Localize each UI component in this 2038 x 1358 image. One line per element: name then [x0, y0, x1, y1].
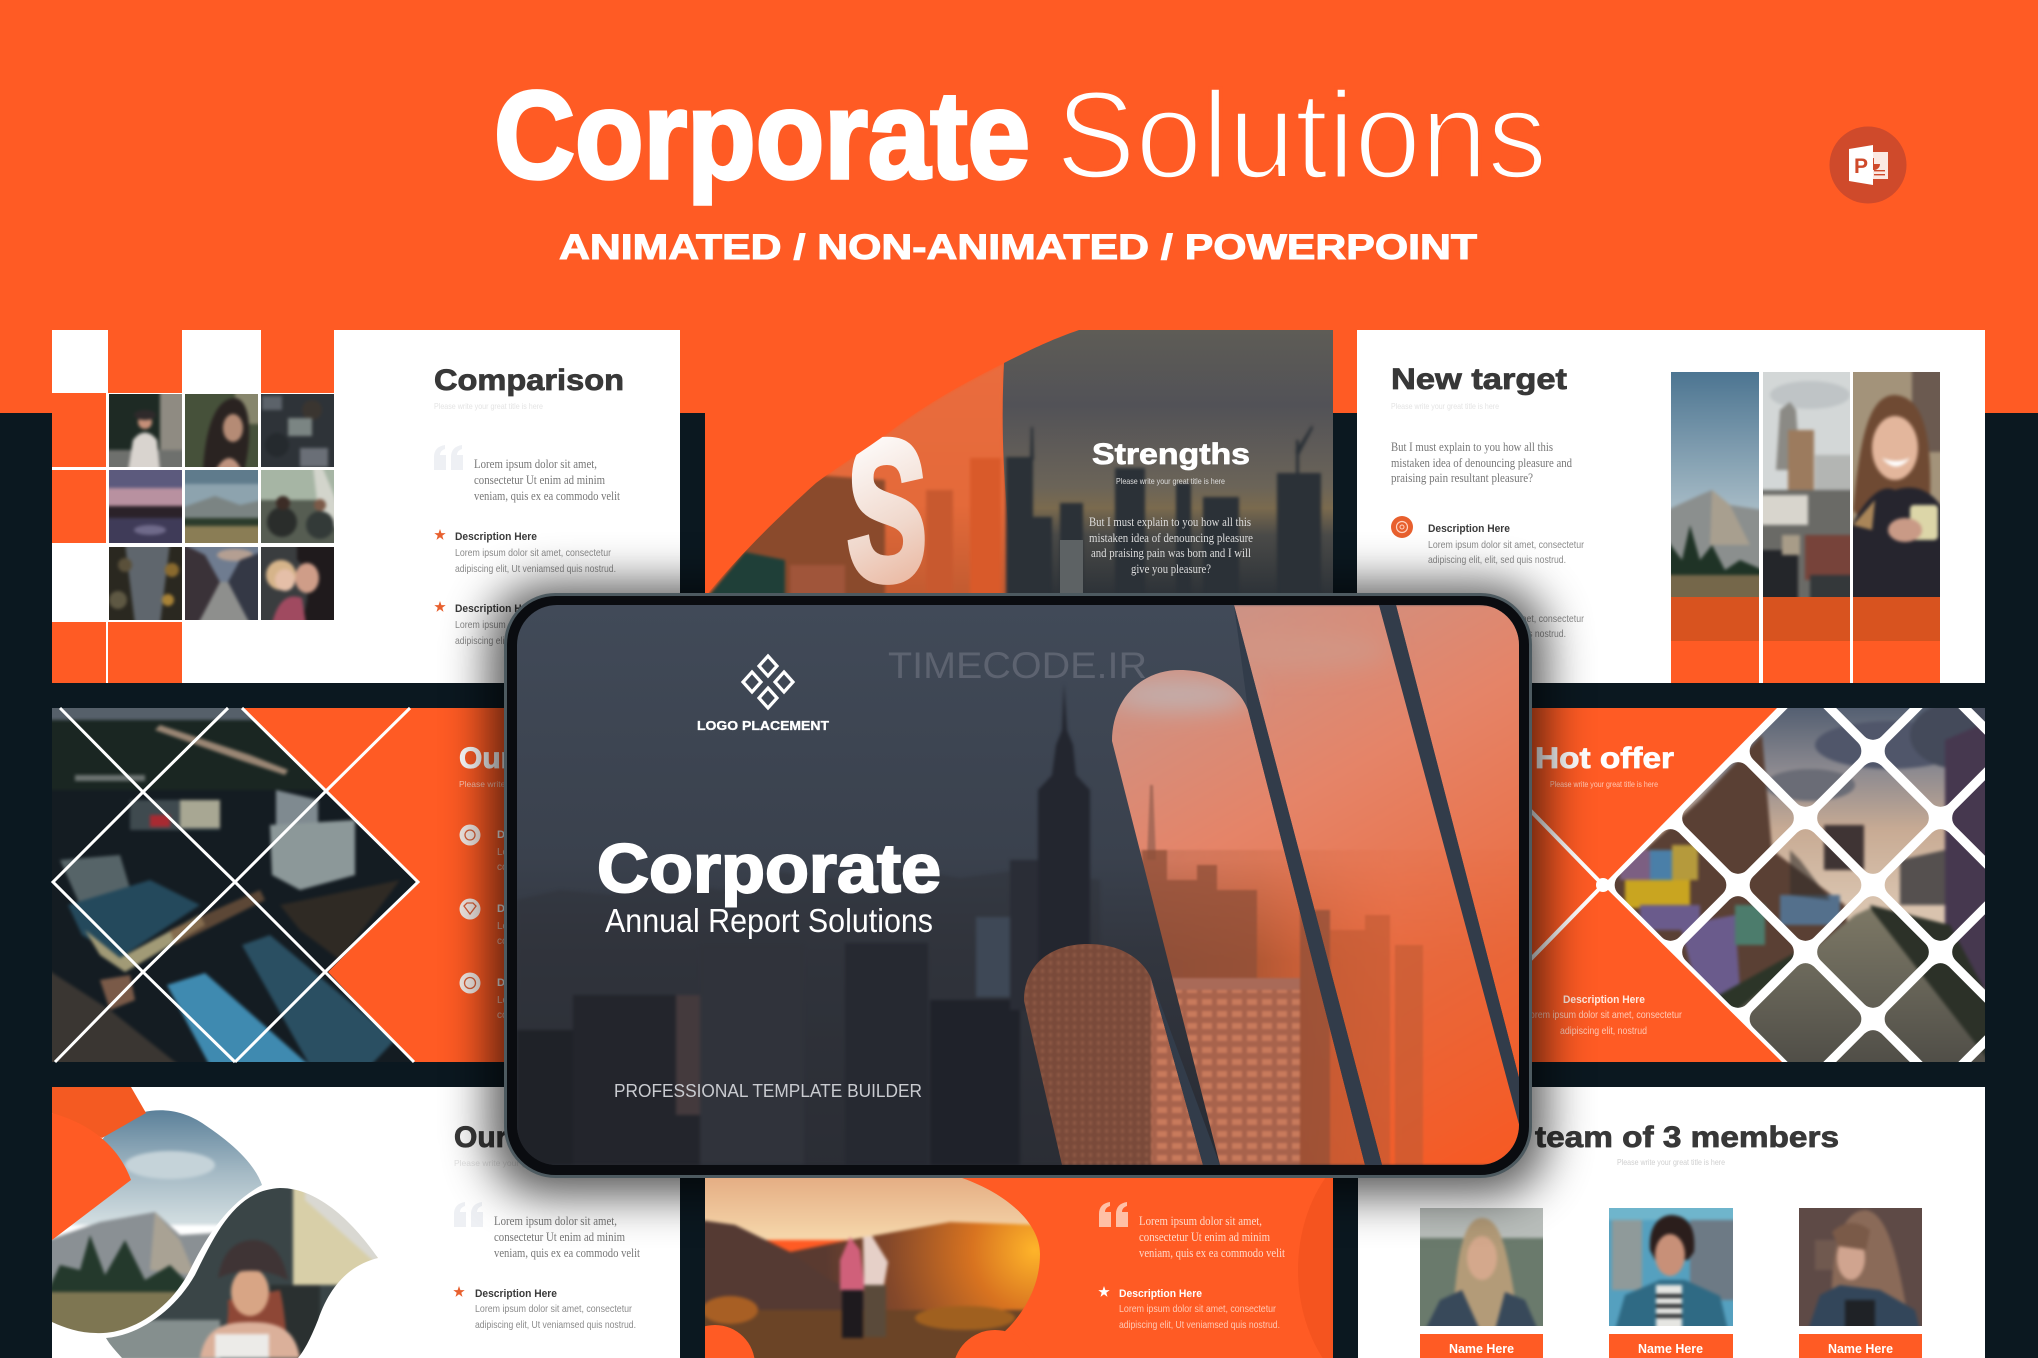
tablet subtitle: Annual Report Solutions [605, 902, 933, 939]
paragraph: mistaken idea of denouncing pleasure [1089, 531, 1253, 545]
orange header background [0, 0, 2038, 413]
quote text: veniam, quis ex ea commodo velit [1139, 1246, 1285, 1260]
caption: Please write your great title is here [1116, 476, 1225, 486]
icon list: Lo [497, 995, 509, 1006]
photo: crowd [261, 394, 334, 467]
dark lower background [0, 413, 2038, 1358]
photo: mother and child [261, 547, 334, 620]
photo: woman in hat [109, 394, 182, 467]
description item 1: Description Here [1428, 523, 1510, 535]
team member 2 [1605, 1204, 1737, 1358]
icon: powerpoint [1830, 126, 1906, 204]
panel: our services slide [51, 706, 504, 1064]
panel: curved photo slide [48, 1087, 680, 1358]
team member 1: Name Here [1449, 1341, 1514, 1356]
quote text: consectetur Ut enim ad minim [1139, 1230, 1270, 1244]
description item 2: adipiscing elit, Ut veniamsed quis nostrud. [455, 635, 616, 647]
paragraph: mistaken idea of denouncing pleasure and [1391, 456, 1573, 470]
photo: people [261, 470, 334, 543]
heading: hot offer: Hot offer [1535, 742, 1674, 775]
caption: Please write your great title is here [1550, 779, 1658, 789]
panel: hot offer slide [1532, 708, 1985, 1062]
description: Lorem ipsum dolor sit amet, consectetur [1525, 1009, 1682, 1021]
icon: powerpoint: P [1854, 155, 1868, 178]
caption: Please write your great title is here [1617, 1157, 1725, 1167]
orange corner shapes [52, 1087, 146, 1240]
icon list: Lo [497, 921, 509, 932]
tablet mockup [506, 594, 1540, 1176]
photo: woman portrait [185, 394, 258, 467]
screen [517, 605, 1540, 1165]
photo grid [105, 390, 338, 624]
icon: quote [1099, 1202, 1128, 1227]
photo: sunset town [109, 470, 182, 543]
subtitle: ANIMATED / NON-ANIMATED / POWERPOINT [559, 228, 1477, 267]
tablet title: Corporate [597, 830, 941, 907]
quote text [494, 1214, 640, 1260]
icon list [460, 824, 509, 1021]
orange curve cover [705, 330, 1079, 600]
mountain blob photo [52, 1110, 262, 1334]
city skyline [517, 683, 1100, 1165]
icon list: co [497, 1010, 508, 1021]
solid orange band [1671, 641, 1940, 683]
icon: logo [743, 656, 793, 708]
team member 2: Name Here [1638, 1341, 1703, 1356]
woman blob photo [100, 1185, 390, 1358]
caption: Please write your great title is here [459, 779, 590, 789]
icon: target [1391, 516, 1413, 538]
paragraph [1089, 515, 1253, 576]
team member 3 [1795, 1204, 1926, 1358]
main title: Solutions [1056, 67, 1547, 205]
description item: adipiscing elit, Ut veniamsed quis nostrud. [1119, 1319, 1280, 1331]
sunset photo [700, 1170, 1045, 1358]
quote text: veniam, quis ex ea commodo velit [474, 489, 620, 503]
description item 2: Lorem ipsum dolor sit amet, consectetur [1428, 613, 1584, 625]
photo: mountains [185, 470, 258, 543]
heading: new target: New target [1391, 363, 1567, 396]
description item 2: Description Here [455, 603, 537, 615]
faint arc [1298, 1178, 1333, 1358]
description item: adipiscing elit, Ut veniamsed quis nostrud. [475, 1319, 636, 1331]
paragraph: and praising pain was born and I will [1091, 546, 1251, 560]
translucent orange band [1671, 597, 1940, 641]
icon list: D [497, 977, 505, 989]
paragraph: But I must explain to you how all this [1089, 515, 1251, 529]
main title: Corporate [494, 67, 1030, 205]
paragraph: But I must explain to you how all this [1391, 440, 1553, 454]
icon list: D [497, 903, 505, 915]
quote text [474, 457, 620, 503]
description: Description Here [1563, 994, 1645, 1006]
white mosaic backing [1603, 708, 1985, 1062]
tablet shadow [490, 585, 1545, 1195]
description item 2: Lorem ipsum dolor sit amet, consectetur [455, 619, 611, 631]
description item: Lorem ipsum dolor sit amet, consectetur [475, 1303, 632, 1315]
panel: sunset slide [705, 1178, 1333, 1358]
quote text: Lorem ipsum dolor sit amet, [494, 1214, 617, 1228]
photo strip: mountain [1671, 372, 1759, 597]
description item 1: Lorem ipsum dolor sit amet, consectetur [455, 547, 611, 559]
heading: comparison: Comparison [434, 364, 624, 397]
diamond photo mosaic [1614, 708, 1985, 1062]
panel: new target slide [1357, 330, 1985, 683]
tablet tagline: PROFESSIONAL TEMPLATE BUILDER [614, 1080, 922, 1101]
photo: street [185, 547, 258, 620]
heading: our: Our [454, 1121, 508, 1154]
thin white lines [1532, 809, 1600, 961]
description item [1098, 1286, 1280, 1331]
description item 1: Description Here [455, 531, 537, 543]
quote text: consectetur Ut enim ad minim [474, 473, 605, 487]
heading: strengths: Strengths [1092, 438, 1250, 471]
description item 2 [1428, 613, 1584, 640]
icon list: Lo [497, 847, 509, 858]
paragraph: praising pain resultant pleasure? [1391, 471, 1533, 485]
icon: quote [434, 445, 463, 470]
description item 1: Lorem ipsum dolor sit amet, consectetur [1428, 539, 1584, 551]
photo strip: woman [1853, 372, 1940, 597]
paragraph [1391, 440, 1573, 485]
big letter S: S [847, 400, 927, 621]
quote text: Lorem ipsum dolor sit amet, [1139, 1214, 1262, 1228]
caption: Please write your great title is here [1391, 401, 1499, 411]
aerial photo [48, 704, 432, 1066]
watermark: TIMECODE.IR [888, 645, 1147, 686]
panel: team slide [1358, 1087, 1985, 1358]
dark city photo [1003, 330, 1333, 600]
description item 2: adipiscing elit, elit, sed quis nostrud. [1428, 628, 1566, 640]
description item: Description Here [1119, 1288, 1202, 1300]
description item 1: adipiscing elit, Ut veniamsed quis nostrud. [455, 563, 616, 575]
paragraph: give you pleasure? [1131, 562, 1211, 576]
main title [494, 67, 1547, 205]
description: adipiscing elit, nostrud [1560, 1025, 1647, 1037]
panel: comparison slide [52, 330, 680, 683]
description item 1: adipiscing elit, elit, sed quis nostrud. [1428, 554, 1566, 566]
photo strip: city [1763, 372, 1850, 597]
caption: Please write your great title is here [454, 1158, 585, 1168]
logo label: LOGO PLACEMENT [697, 718, 829, 733]
couple [840, 1236, 888, 1338]
heading: team: team of 3 members [1535, 1121, 1839, 1154]
icon: quote [454, 1202, 483, 1227]
orange circles [705, 1325, 1005, 1358]
icon list: co [497, 862, 508, 873]
icon list: co [497, 936, 508, 947]
orange window shapes [1000, 605, 1540, 1165]
description item: Lorem ipsum dolor sit amet, consectetur [1119, 1303, 1276, 1315]
description [1525, 994, 1682, 1037]
quote text: consectetur Ut enim ad minim [494, 1230, 625, 1244]
orange tinted photo [705, 363, 1020, 600]
panel: strengths slide [705, 330, 1333, 621]
description item 1 [434, 529, 616, 575]
quote text: Lorem ipsum dolor sit amet, [474, 457, 597, 471]
description item 2 [434, 601, 616, 647]
orange checker tiles [52, 393, 182, 683]
quote text [1139, 1214, 1285, 1260]
heading: our: Our [459, 742, 513, 775]
diamond grid lines [53, 708, 418, 1062]
description item [453, 1286, 636, 1331]
team member 3: Name Here [1828, 1341, 1893, 1356]
photo: tower and leaves [109, 547, 182, 620]
description item: Description Here [475, 1288, 557, 1300]
caption: Please write your great title is here [434, 401, 543, 411]
slate stripes [1151, 605, 1530, 1165]
quote text: veniam, quis ex ea commodo velit [494, 1246, 640, 1260]
team member 1 [1416, 1204, 1547, 1358]
icon list: D [497, 829, 505, 841]
description item 1 [1428, 523, 1584, 566]
